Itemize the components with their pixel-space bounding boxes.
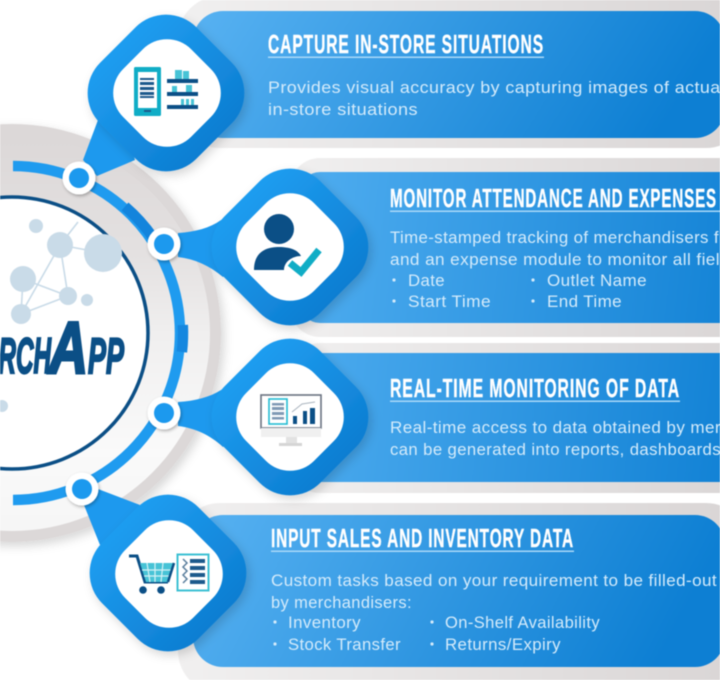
list: input sales fields: Returns/Expiry: [445, 635, 561, 654]
heading: capture: CAPTURE IN-STORE SITUATIONS: [268, 29, 544, 59]
text: capture description: in-store situations: [268, 100, 418, 119]
white tile: attendance: [222, 179, 358, 315]
logo circle: [0, 197, 148, 469]
connector: attendance: [178, 220, 250, 277]
white tile: capture: [99, 25, 235, 161]
text: attendance description: [390, 228, 720, 269]
panel: backing circle: [0, 124, 221, 542]
connector: real-time: [178, 390, 250, 447]
connector: input sales: [84, 489, 140, 545]
panel: capture in-store situations: [178, 0, 720, 148]
diamond: attendance: [194, 151, 386, 343]
white tile: input sales: [101, 506, 237, 642]
list: attendance fields: [392, 271, 647, 311]
icon: phone and shelves: [134, 67, 198, 116]
text: real-time description: [390, 418, 720, 459]
logo: MerchApp wordmark: [0, 308, 124, 389]
list: input sales fields: On-Shelf Availability: [445, 613, 600, 632]
icon: monitor with report and bars: [261, 395, 321, 446]
text: input sales description: by merchandisers:: [271, 593, 412, 612]
node: capture: [62, 162, 96, 194]
panel: real-time monitoring of data: [290, 343, 720, 493]
text: attendance description: Time-stamped tracking of merchandisers f: [390, 228, 719, 247]
text: capture description: [268, 78, 720, 119]
text: real-time description: Real-time access to data obtained by mer: [390, 418, 720, 437]
node: attendance: [148, 228, 180, 260]
logo: MerchApp wordmark: PP: [88, 328, 124, 384]
icon: network graphic: [0, 219, 122, 412]
list: input sales fields: Inventory: [288, 613, 361, 632]
list: input sales fields: Stock Transfer: [288, 635, 401, 654]
text: input sales description: [271, 571, 717, 612]
text: capture description: Provides visual accuracy by capturing images of actual: [268, 78, 720, 97]
diamond: capture: [70, 0, 262, 189]
list: attendance fields: End Time: [547, 292, 622, 311]
progress ring: [13, 166, 183, 500]
list: attendance fields: Outlet Name: [547, 271, 647, 290]
logo: MerchApp wordmark: A: [48, 308, 88, 389]
panel: input sales and inventory data: [178, 503, 720, 680]
list: input sales fields: [273, 613, 600, 654]
connector: capture: [83, 120, 135, 176]
node: input sales: [66, 472, 98, 506]
diamond: real-time: [194, 321, 386, 513]
node: real-time: [148, 396, 180, 430]
diamond: input sales: [72, 477, 264, 669]
text: attendance description: and an expense module to monitor all fiel: [390, 250, 720, 269]
icon: cart with checklist: [129, 554, 208, 594]
text: input sales description: Custom tasks based on your requirement to be filled-out: [271, 571, 717, 590]
text: real-time description: can be generated into reports, dashboards: [390, 440, 720, 459]
list: attendance fields: Start Time: [408, 292, 491, 311]
panel: monitor attendance and expenses: [290, 158, 720, 337]
icon: person with check mark: [254, 214, 319, 272]
white tile: real-time: [222, 349, 358, 485]
list: attendance fields: Date: [408, 271, 445, 290]
